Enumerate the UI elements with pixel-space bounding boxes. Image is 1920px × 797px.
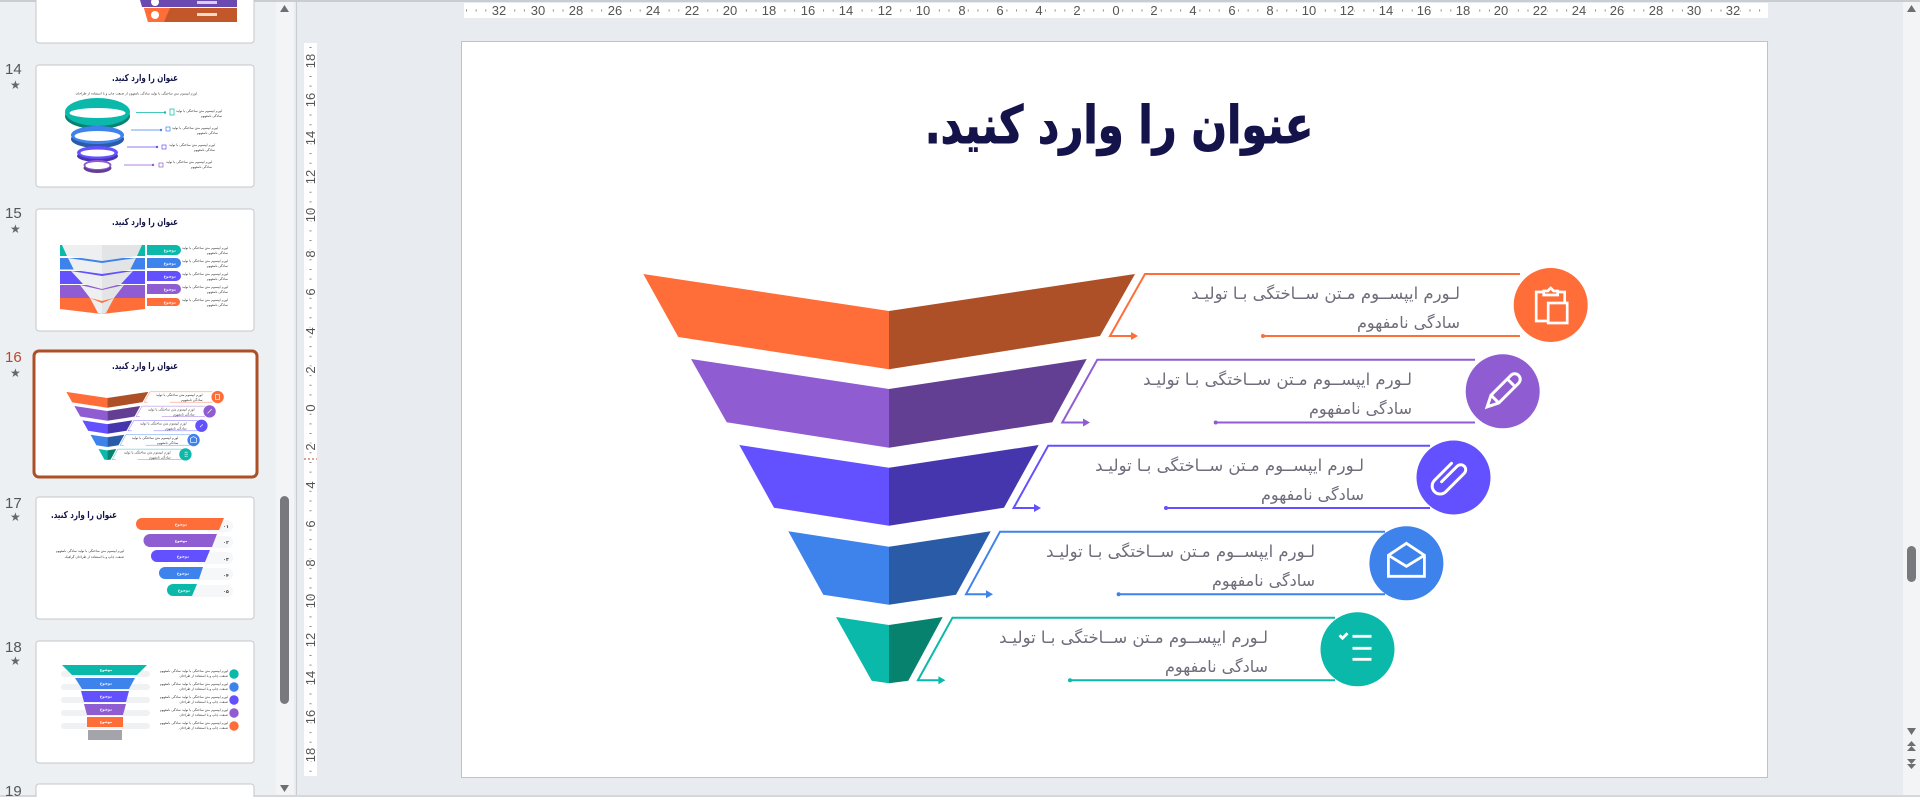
callout 3	[1014, 440, 1490, 514]
thumbnail 18	[5, 639, 254, 763]
vertical ruler: 4	[303, 327, 318, 335]
horizontal ruler: 22	[685, 3, 699, 18]
icon: paperclip	[1416, 440, 1490, 514]
text 4: سادگی نامفهوم	[1212, 571, 1315, 591]
thumbnail 18: صنعت چاپ و با استفاده از طراحان	[180, 674, 228, 678]
thumbnail 14: لورم ایپسوم متن ساختگی با تولید	[172, 126, 218, 131]
text 1: لـورم ایپســوم مـتن ســاختگی بـا تولیـد	[1191, 284, 1460, 304]
text 5	[999, 628, 1268, 677]
text 4	[1046, 542, 1315, 591]
thumbnail 18: موضوع	[100, 682, 112, 686]
vertical ruler: 10	[303, 594, 318, 608]
thumbnail 16 selected: لورم ایپسوم متن ساختگی با تولید	[156, 393, 203, 398]
horizontal ruler: 28	[1649, 3, 1663, 18]
thumbnail 17: ★	[10, 510, 21, 524]
horizontal ruler: 32	[1726, 3, 1740, 18]
horizontal ruler: 12	[878, 3, 892, 18]
vertical ruler: 18	[303, 748, 318, 762]
thumbnail 16 selected: سادگی نامفهوم	[181, 398, 203, 403]
thumbnail 18: موضوع	[100, 720, 112, 724]
thumbnail 14: عنوان را وارد کنید.	[112, 72, 178, 84]
thumbnail 18: لورم ایپسوم متن ساختگی با تولید سادگی نامفهوم	[160, 721, 228, 726]
thumbnail 18: صنعت چاپ و با استفاده از طراحان	[180, 713, 228, 717]
arrow and dot 3	[1034, 504, 1168, 512]
vertical ruler: 2	[303, 443, 318, 451]
panel: slide thumbnails	[5, 0, 257, 797]
thumbnail 15: موضوع	[164, 248, 176, 252]
thumbnail 14: لورم ایپسوم متن ساختگی با تولید	[176, 109, 222, 114]
thumbnail 15: 15	[5, 205, 22, 222]
thumbnail 16 selected: 16	[5, 349, 22, 366]
icon: open envelope	[1369, 526, 1443, 600]
thumbnail 15: سادگی نامفهوم	[207, 264, 228, 269]
horizontal ruler: 20	[723, 3, 737, 18]
connector frame 5	[918, 618, 1335, 680]
icon: checklist	[1320, 612, 1394, 686]
thumbnail 18: لورم ایپسوم متن ساختگی با تولید سادگی نامفهوم	[160, 708, 228, 713]
horizontal ruler: 12	[1340, 3, 1354, 18]
thumbnail 17: ۰۱	[223, 525, 229, 530]
thumbnail 15	[5, 205, 254, 331]
thumbnail 16 selected: عنوان را وارد کنید.	[112, 360, 178, 372]
horizontal ruler: 10	[916, 3, 930, 18]
thumbnail 18: موضوع	[100, 708, 112, 712]
thumbnail 15: لورم ایپسوم متن ساختگی با تولید	[182, 272, 228, 277]
thumbnail 17: ۰۲	[223, 540, 229, 546]
vertical ruler: 16	[303, 93, 318, 107]
funnel layer 5	[836, 617, 943, 683]
thumbnail 18: موضوع	[100, 668, 112, 672]
arrow and dot 4	[986, 590, 1121, 598]
thumbnail scrollbar	[276, 2, 294, 795]
thumbnail 15: سادگی نامفهوم	[207, 290, 228, 295]
funnel	[643, 274, 1135, 683]
title: عنوان را وارد کنید.	[925, 96, 1313, 156]
thumbnail 15: موضوع	[164, 288, 176, 292]
thumbnail 14	[5, 61, 254, 187]
funnel layer 1	[643, 274, 1135, 369]
callout 2	[1062, 354, 1540, 428]
panel: main slide	[462, 42, 1768, 778]
arrow and dot 2	[1083, 418, 1218, 426]
thumbnail 15: عنوان را وارد کنید.	[112, 216, 178, 228]
horizontal ruler: 4	[1189, 3, 1197, 18]
thumbnail 14: ★	[10, 78, 21, 92]
horizontal ruler: 30	[531, 3, 545, 18]
icon: pencil	[1466, 354, 1540, 428]
text 5: سادگی نامفهوم	[1165, 657, 1268, 677]
thumbnail 18: موضوع	[100, 694, 112, 698]
thumbnail 15: لورم ایپسوم متن ساختگی با تولید	[182, 259, 228, 264]
thumbnail 18: لورم ایپسوم متن ساختگی با تولید سادگی نامفهوم	[160, 669, 228, 674]
thumbnail 14: لورم ایپسوم متن ساختگی با تولید	[166, 160, 212, 165]
text 1: سادگی نامفهوم	[1357, 313, 1460, 333]
connector frame 4	[966, 532, 1385, 594]
horizontal ruler: 24	[646, 3, 660, 18]
thumbnail 17: عنوان را وارد کنید.	[51, 509, 117, 521]
thumbnail 17: موضوع	[175, 522, 187, 526]
horizontal ruler: 32	[492, 3, 506, 18]
thumbnail 18: صنعت چاپ و با استفاده از طراحان	[180, 726, 228, 730]
thumbnail 19	[5, 783, 254, 797]
connector frame 2	[1062, 360, 1475, 422]
vertical ruler: 2	[303, 366, 318, 374]
horizontal ruler: 2	[1073, 3, 1081, 18]
thumbnail 18: لورم ایپسوم متن ساختگی با تولید سادگی نامفهوم	[160, 695, 228, 700]
horizontal ruler: 24	[1572, 3, 1586, 18]
thumbnail 18: لورم ایپسوم متن ساختگی با تولید سادگی نامفهوم	[160, 682, 228, 687]
arrow and dot 5	[938, 676, 1072, 684]
callout 5	[918, 612, 1394, 686]
connector frame 3	[1014, 446, 1430, 508]
vertical ruler: 8	[303, 559, 318, 567]
thumbnail 18: صنعت چاپ و با استفاده از طراحان	[180, 687, 228, 691]
horizontal ruler: 16	[801, 3, 815, 18]
horizontal ruler: 22	[1533, 3, 1547, 18]
thumbnail 16 selected: لورم ایپسوم متن ساختگی با تولید	[132, 436, 178, 441]
text 3: سادگی نامفهوم	[1261, 485, 1364, 505]
thumbnail 16 selected: لورم ایپسوم متن ساختگی با تولید	[140, 422, 187, 427]
thumbnail 14: لورم ایپسوم متن ساختگی با تولید سادگی نامفهوم از صنعت چاپ و با استفاده از طراحان	[76, 92, 197, 96]
thumbnail 17: ۰۳	[223, 557, 229, 563]
thumbnail 17: موضوع	[177, 572, 189, 576]
horizontal ruler: 26	[1610, 3, 1624, 18]
horizontal ruler: 8	[958, 3, 966, 18]
horizontal ruler: 8	[1266, 3, 1274, 18]
horizontal ruler: 10	[1302, 3, 1316, 18]
thumbnail 16 selected: ★	[10, 366, 21, 380]
vertical ruler: 6	[303, 288, 318, 296]
thumbnail 14: سادگی نامفهوم	[201, 114, 222, 119]
horizontal ruler	[464, 3, 1768, 18]
thumbnail 14: لورم ایپسوم متن ساختگی با تولید	[169, 143, 215, 148]
thumbnail 15: موضوع	[164, 274, 176, 278]
horizontal ruler: 14	[1379, 3, 1393, 18]
text 3	[1095, 456, 1364, 505]
thumbnail 17	[5, 495, 254, 619]
thumbnail 15: سادگی نامفهوم	[207, 303, 228, 308]
thumbnail 16 selected: لورم ایپسوم متن ساختگی با تولید	[148, 407, 195, 412]
icon: clipboard	[1514, 268, 1588, 342]
connector frame 1	[1110, 274, 1520, 336]
horizontal ruler: 2	[1150, 3, 1158, 18]
thumbnail 15: سادگی نامفهوم	[207, 251, 228, 256]
thumbnail 14: سادگی نامفهوم	[194, 148, 215, 153]
thumbnail 18: ★	[10, 654, 21, 668]
thumbnail 17: 17	[5, 495, 22, 512]
funnel layer 4	[788, 531, 991, 605]
right scrollbar	[1903, 2, 1920, 795]
callout 1	[1110, 268, 1588, 342]
arrow and dot 1	[1131, 332, 1265, 340]
thumbnail 15: لورم ایپسوم متن ساختگی با تولید	[182, 246, 228, 251]
thumbnail 14: سادگی نامفهوم	[191, 165, 212, 170]
thumbnail 15: لورم ایپسوم متن ساختگی با تولید	[182, 285, 228, 290]
thumbnail 17: موضوع	[175, 539, 187, 543]
horizontal ruler: 14	[839, 3, 853, 18]
vertical ruler: 14	[303, 131, 318, 145]
horizontal ruler: 0	[1112, 3, 1120, 18]
funnel layer 2	[691, 359, 1087, 448]
thumbnail 17: صنعت چاپ و با استفاده از طراحان گرافیک	[65, 555, 124, 559]
thumbnail 16 selected: سادگی نامفهوم	[173, 412, 195, 417]
thumbnail 18: صنعت چاپ و با استفاده از طراحان	[180, 700, 228, 704]
vertical ruler: 12	[303, 633, 318, 647]
thumbnail 15: سادگی نامفهوم	[207, 277, 228, 282]
horizontal ruler: 20	[1494, 3, 1508, 18]
thumbnail 15: ★	[10, 222, 21, 236]
thumbnail 16 selected: سادگی نامفهوم	[157, 441, 179, 446]
thumbnail 18: 18	[5, 639, 22, 656]
horizontal ruler: 16	[1417, 3, 1431, 18]
horizontal ruler: 30	[1687, 3, 1701, 18]
text 1	[1191, 284, 1460, 333]
vertical ruler: 0	[303, 404, 318, 412]
text 3: لـورم ایپســوم مـتن ســاختگی بـا تولیـد	[1095, 456, 1364, 476]
text 2	[1143, 370, 1412, 419]
vertical ruler: 6	[303, 520, 318, 528]
thumbnail 16 selected: سادگی نامفهوم	[149, 455, 171, 460]
thumbnail 15: لورم ایپسوم متن ساختگی با تولید	[182, 298, 228, 303]
thumbnail 17: موضوع	[178, 588, 190, 592]
horizontal ruler: 6	[1228, 3, 1236, 18]
thumbnail 17: ۰۵	[223, 590, 229, 595]
horizontal ruler: 28	[569, 3, 583, 18]
text 5: لـورم ایپســوم مـتن ســاختگی بـا تولیـد	[999, 628, 1268, 648]
vertical ruler: 12	[303, 170, 318, 184]
thumbnail 15: موضوع	[164, 262, 176, 266]
thumbnail 14: 14	[5, 61, 22, 78]
vertical ruler: 10	[303, 208, 318, 222]
horizontal ruler: 18	[1456, 3, 1470, 18]
thumbnail 17: لورم ایپسوم متن ساختگی با تولید سادگی نامفهوم	[56, 549, 124, 554]
horizontal ruler: 6	[996, 3, 1004, 18]
horizontal ruler: 18	[762, 3, 776, 18]
thumbnail 17: موضوع	[177, 554, 189, 558]
horizontal ruler: 26	[608, 3, 622, 18]
text 4: لـورم ایپســوم مـتن ســاختگی بـا تولیـد	[1046, 542, 1315, 562]
vertical ruler	[303, 43, 318, 776]
vertical ruler: 16	[303, 710, 318, 724]
vertical ruler: 14	[303, 671, 318, 685]
horizontal ruler: 4	[1035, 3, 1043, 18]
vertical ruler: 18	[303, 54, 318, 68]
thumbnail 13	[36, 0, 254, 43]
thumbnail 16 selected: سادگی نامفهوم	[165, 427, 187, 432]
funnel layer 3	[739, 445, 1039, 526]
text 2: سادگی نامفهوم	[1309, 399, 1412, 419]
vertical ruler: 4	[303, 481, 318, 489]
thumbnail 14: سادگی نامفهوم	[197, 131, 218, 136]
vertical ruler: 8	[303, 250, 318, 258]
thumbnail 16 selected: لورم ایپسوم متن ساختگی با تولید	[124, 450, 171, 455]
text 2: لـورم ایپســوم مـتن ســاختگی بـا تولیـد	[1143, 370, 1412, 390]
thumbnail 16 selected	[5, 349, 257, 477]
thumbnail 15: موضوع	[164, 300, 176, 304]
thumbnail 17: ۰۴	[223, 574, 229, 579]
callout 4	[966, 526, 1443, 600]
